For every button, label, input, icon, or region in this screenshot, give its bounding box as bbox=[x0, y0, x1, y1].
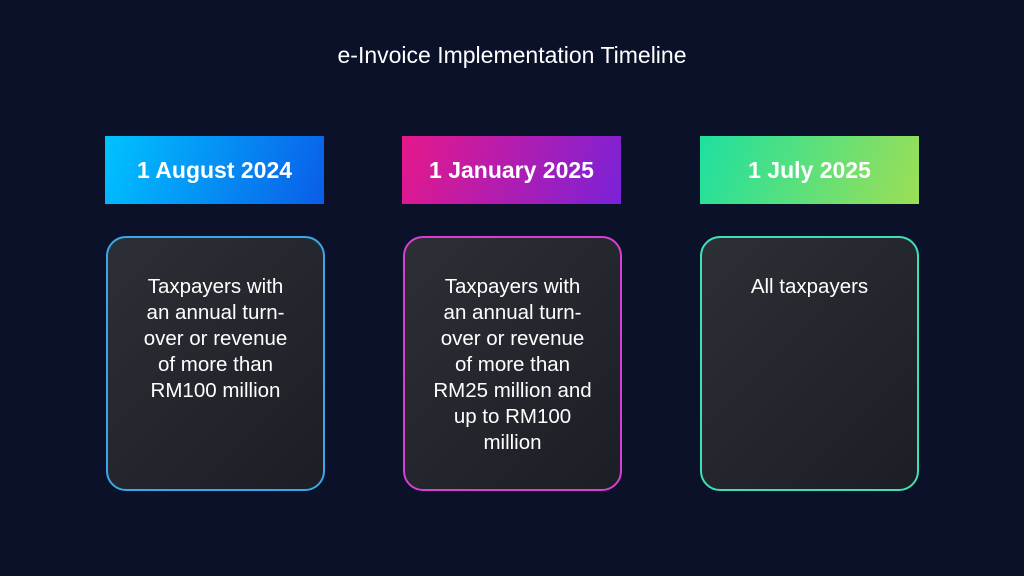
card: July 2025: All taxpayers bbox=[751, 275, 868, 298]
card: August 2024: over or revenue bbox=[144, 327, 287, 350]
card: January 2025: million bbox=[483, 431, 542, 454]
card: January 2025: an annual turn- bbox=[444, 301, 581, 324]
card: January 2025 bbox=[403, 236, 622, 491]
card: January 2025: Taxpayers with bbox=[445, 275, 580, 298]
header: 1 July 2025: 1 July 2025 bbox=[748, 157, 871, 183]
card: August 2024: Taxpayers with bbox=[148, 275, 283, 298]
card: July 2025 bbox=[700, 236, 919, 491]
card: January 2025: RM25 million and bbox=[433, 379, 592, 402]
title: e-Invoice Implementation Timeline bbox=[338, 42, 686, 68]
header: 1 July 2025 bbox=[700, 136, 919, 204]
card: August 2024: RM100 million bbox=[151, 379, 280, 402]
card: January 2025: of more than bbox=[455, 353, 570, 376]
card: August 2024: of more than bbox=[158, 353, 273, 376]
header: 1 August 2024: 1 August 2024 bbox=[137, 157, 292, 183]
card: August 2024: an annual turn- bbox=[147, 301, 284, 324]
card: January 2025: up to RM100 bbox=[454, 405, 571, 428]
card: August 2024 bbox=[106, 236, 325, 491]
header: 1 January 2025 bbox=[402, 136, 621, 204]
header: 1 January 2025: 1 January 2025 bbox=[429, 157, 594, 183]
header: 1 August 2024 bbox=[105, 136, 324, 204]
card: January 2025: over or revenue bbox=[441, 327, 584, 350]
